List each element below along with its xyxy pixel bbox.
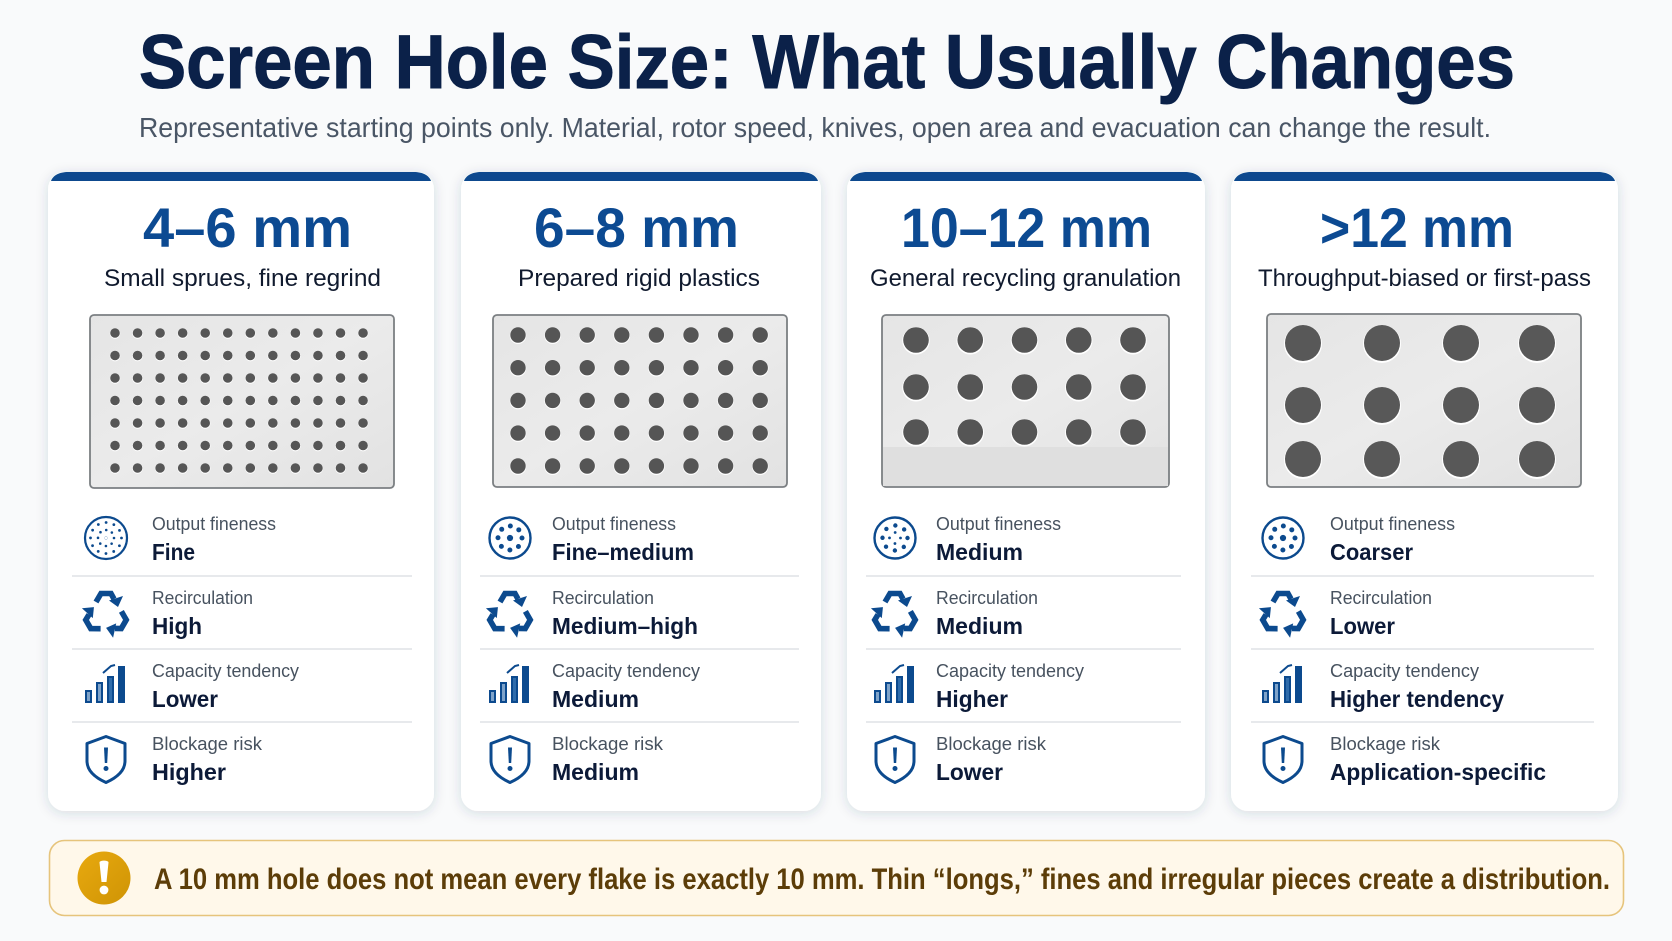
metric: output fineness: Fine bbox=[152, 539, 195, 565]
icon: blockage shield bbox=[87, 736, 125, 782]
card background bbox=[48, 172, 434, 811]
icon: output fineness bbox=[85, 517, 127, 559]
metric: blockage risk: Higher bbox=[152, 759, 226, 785]
metric: output fineness bbox=[1330, 514, 1455, 565]
metric: recirculation bbox=[152, 588, 253, 639]
icon: capacity bbox=[86, 665, 125, 703]
icon: capacity bbox=[875, 665, 914, 703]
metric: capacity tendency: Capacity tendency bbox=[1330, 661, 1479, 681]
metric: output fineness: Coarser bbox=[1330, 539, 1413, 565]
metric: recirculation: Recirculation bbox=[1330, 588, 1432, 608]
metric: output fineness bbox=[936, 514, 1061, 565]
metric: blockage risk: Blockage risk bbox=[936, 734, 1047, 754]
screen plate: medium holes bbox=[493, 315, 787, 487]
metric: capacity tendency: Higher bbox=[936, 686, 1008, 712]
metric: output fineness: Output fineness bbox=[152, 514, 276, 534]
screen plate: largest holes bbox=[1267, 314, 1581, 487]
metric: capacity tendency: Higher tendency bbox=[1330, 686, 1504, 712]
metric: recirculation: Recirculation bbox=[936, 588, 1038, 608]
metric: recirculation bbox=[936, 588, 1038, 639]
icon: recirculation bbox=[484, 594, 533, 639]
metric: capacity tendency bbox=[936, 661, 1084, 712]
metric: blockage risk: Blockage risk bbox=[1330, 734, 1441, 754]
metric: output fineness bbox=[152, 514, 276, 565]
metric: recirculation: Medium bbox=[936, 613, 1023, 639]
icon: warning bbox=[78, 852, 130, 904]
metric: output fineness bbox=[552, 514, 694, 565]
subtitle: Representative starting points only. Material, rotor speed, knives, open area and evacuation can change the result. bbox=[139, 112, 1491, 143]
title: Screen Hole Size: What Usually Changes bbox=[139, 20, 1515, 105]
use case: Prepared rigid plastics bbox=[518, 265, 760, 292]
panel: 6–8 mm bbox=[461, 172, 821, 811]
card background bbox=[1231, 172, 1618, 811]
panel: 10–12 mm bbox=[847, 172, 1205, 811]
metric: recirculation: Recirculation bbox=[152, 588, 253, 608]
callout bbox=[50, 840, 1624, 916]
metric: capacity tendency bbox=[1330, 661, 1504, 712]
metric: capacity tendency: Capacity tendency bbox=[152, 661, 299, 681]
size heading: 10–12 mm bbox=[901, 196, 1152, 259]
metric: blockage risk bbox=[552, 734, 664, 785]
icon: blockage shield bbox=[1264, 736, 1302, 782]
metric: recirculation: Medium–high bbox=[552, 613, 698, 639]
metric: recirculation: Lower bbox=[1330, 613, 1395, 639]
size heading: >12 mm bbox=[1320, 196, 1514, 259]
panel: 4–6 mm bbox=[48, 172, 434, 811]
icon: recirculation bbox=[80, 594, 129, 639]
icon: capacity bbox=[490, 665, 529, 703]
metric: output fineness: Medium bbox=[936, 539, 1023, 565]
screen plate: large holes bbox=[882, 315, 1169, 487]
metric: output fineness: Fine–medium bbox=[552, 539, 694, 565]
icon: recirculation bbox=[869, 594, 918, 639]
use case: Throughput-biased or first-pass bbox=[1258, 265, 1591, 292]
metric: blockage risk: Medium bbox=[552, 759, 639, 785]
icon: blockage shield bbox=[876, 736, 914, 782]
metric: blockage risk: Blockage risk bbox=[552, 734, 664, 754]
size heading: 6–8 mm bbox=[534, 196, 739, 259]
metric: output fineness: Output fineness bbox=[1330, 514, 1455, 534]
metric: capacity tendency: Capacity tendency bbox=[936, 661, 1084, 681]
metric: recirculation: High bbox=[152, 613, 202, 639]
metric: blockage risk bbox=[1330, 734, 1546, 785]
metric: blockage risk: Blockage risk bbox=[152, 734, 263, 754]
use case: General recycling granulation bbox=[870, 265, 1181, 292]
metric: recirculation bbox=[552, 588, 698, 639]
metric: output fineness: Output fineness bbox=[936, 514, 1061, 534]
screen plate: small holes bbox=[90, 315, 394, 488]
metric: output fineness: Output fineness bbox=[552, 514, 676, 534]
metric: capacity tendency bbox=[152, 661, 299, 712]
icon: blockage shield bbox=[491, 736, 529, 782]
card background bbox=[847, 172, 1205, 811]
metric: recirculation: Recirculation bbox=[552, 588, 654, 608]
metric: recirculation bbox=[1330, 588, 1432, 639]
metric: capacity tendency: Medium bbox=[552, 686, 639, 712]
size heading: 4–6 mm bbox=[143, 196, 352, 259]
metric: blockage risk bbox=[936, 734, 1047, 785]
metric: capacity tendency bbox=[552, 661, 700, 712]
card background bbox=[461, 172, 821, 811]
icon: output fineness bbox=[490, 518, 530, 558]
icon: recirculation bbox=[1257, 594, 1306, 639]
metric: capacity tendency: Lower bbox=[152, 686, 218, 712]
icon: output fineness bbox=[1262, 518, 1304, 558]
panel: >12 mm bbox=[1231, 172, 1618, 811]
icon: output fineness bbox=[874, 518, 916, 558]
use case: Small sprues, fine regrind bbox=[104, 265, 381, 292]
metric: blockage risk: Application-specific bbox=[1330, 759, 1546, 785]
icon: capacity bbox=[1263, 665, 1302, 703]
metric: blockage risk: Lower bbox=[936, 759, 1003, 785]
metric: blockage risk bbox=[152, 734, 263, 785]
metric: capacity tendency: Capacity tendency bbox=[552, 661, 700, 681]
